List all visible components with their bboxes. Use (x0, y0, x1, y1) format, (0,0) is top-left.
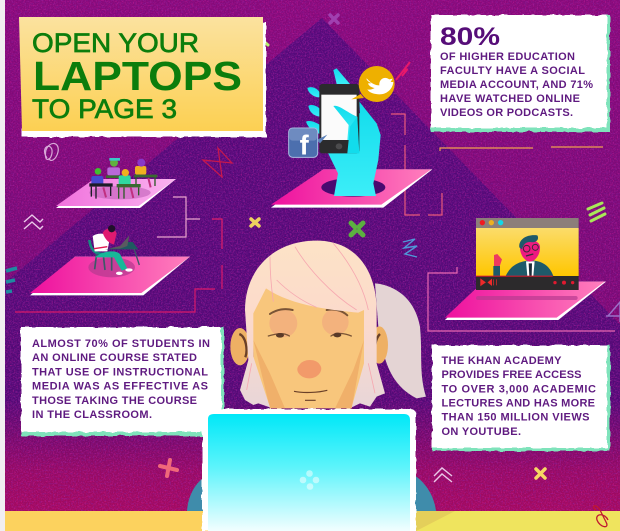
title text: TO PAGE 3 (32, 94, 177, 124)
students (89, 158, 157, 199)
panel: Khan Academy stat: TO OVER 3,000 ACADEMIC (442, 384, 596, 396)
panel: online course stat: AN ONLINE COURSE STATED (32, 352, 197, 364)
presenter (506, 261, 553, 276)
laptop (202, 409, 416, 531)
cheeks (269, 309, 349, 337)
panel: 80% stat: OF HIGHER EDUCATION (440, 51, 575, 63)
panel: online course stat: THOSE TAKING THE COURSE (32, 395, 197, 407)
phone (319, 84, 359, 153)
hair (240, 241, 385, 407)
person: shoulders (187, 475, 436, 511)
decorative squiggles and brackets (15, 62, 620, 482)
face (252, 287, 365, 408)
panel: Khan Academy stat (432, 345, 610, 451)
panel: 80% stat: 80% (440, 23, 500, 51)
video window (476, 218, 579, 290)
icon: facebook: f (300, 130, 310, 161)
illustration: hand holding phone (271, 66, 432, 208)
title panel (19, 17, 266, 137)
player controls (481, 279, 497, 286)
panel: Khan Academy stat: PROVIDES FREE ACCESS (442, 369, 582, 381)
brows and eyes (268, 309, 351, 336)
panel: Khan Academy stat: LECTURES AND HAS MORE (442, 398, 595, 410)
panel: Khan Academy stat: THAN 150 MILLION VIEWS (442, 412, 590, 424)
panel: 80% stat (431, 15, 610, 132)
laptop logo (300, 470, 319, 490)
platform (271, 169, 432, 208)
chain scribble (593, 506, 608, 527)
panel: 80% stat: VIDEOS OR PODCASTS. (440, 107, 573, 119)
person: head (230, 241, 426, 408)
icon: facebook (289, 128, 327, 161)
nose (297, 360, 321, 378)
panel: 80% stat: FACULTY HAVE A SOCIAL (440, 65, 585, 77)
illustration: classroom platform (56, 158, 176, 208)
title text (32, 28, 242, 124)
panel: online course stat: IN THE CLASSROOM. (32, 409, 152, 421)
student (89, 225, 139, 275)
ears (230, 326, 388, 365)
title text: OPEN YOUR (32, 28, 199, 58)
panel: online course stat (21, 327, 224, 436)
title text: LAPTOPS (33, 53, 242, 99)
icon: twitter (351, 66, 395, 102)
panel: online course stat: THAT USE OF INSTRUCTIONAL (32, 366, 208, 378)
panel: online course stat: MEDIA WAS AS EFFECTIVE AS (32, 380, 208, 392)
mouth (294, 390, 327, 400)
panel: Khan Academy stat: THE KHAN ACADEMY (442, 355, 562, 367)
panel: Khan Academy stat: ON YOUTUBE. (442, 426, 521, 438)
bottom band (5, 511, 620, 531)
panel: 80% stat: HAVE WATCHED ONLINE (440, 93, 580, 105)
illustration: video lecture platform (445, 218, 606, 320)
hand (306, 68, 381, 196)
illustration: student with laptop platform (30, 225, 190, 295)
ponytail (375, 283, 426, 398)
panel: online course stat: ALMOST 70% OF STUDENTS IN (32, 338, 210, 350)
panel: 80% stat: MEDIA ACCOUNT, AND 71% (440, 79, 593, 91)
